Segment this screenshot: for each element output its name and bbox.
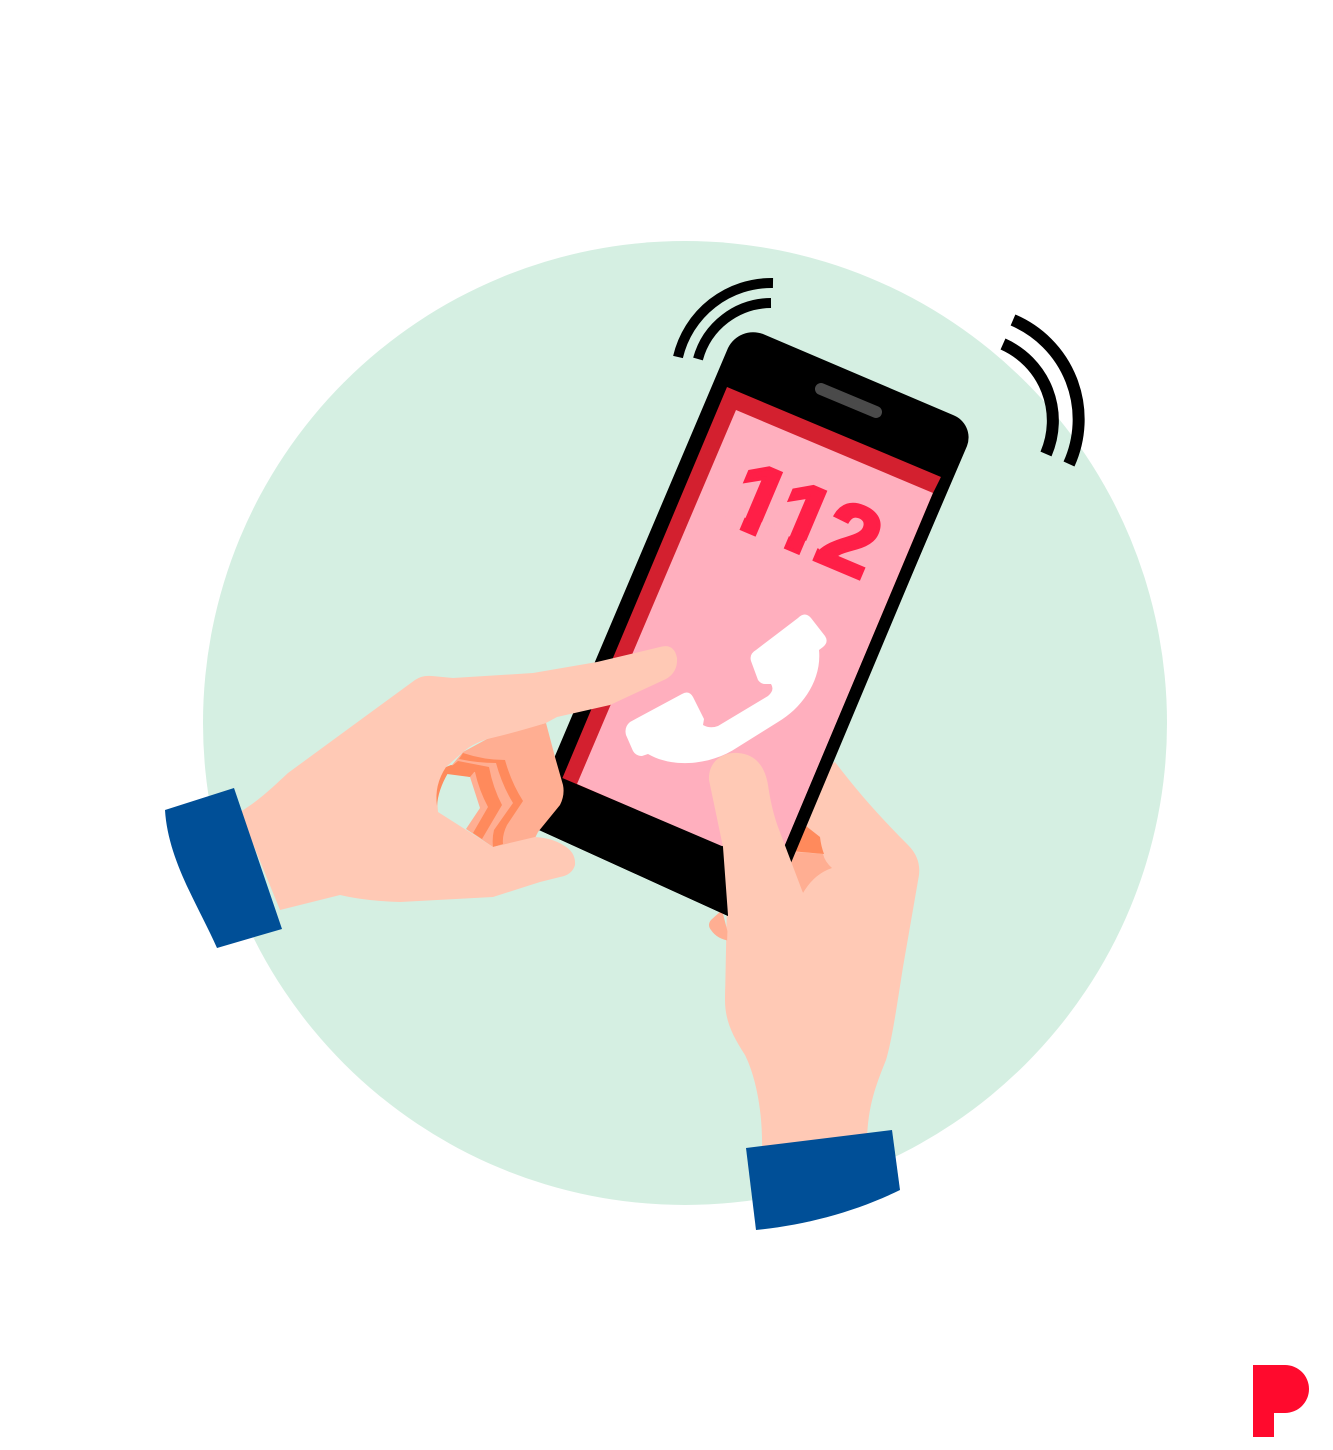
screen header band <box>562 387 941 846</box>
shadow on hand edge <box>436 767 448 806</box>
finger crease middle <box>452 761 502 839</box>
sound arc left outer <box>678 283 773 357</box>
finger crease outer <box>459 753 523 847</box>
hand and index finger <box>240 646 677 910</box>
curled fingers <box>446 723 564 847</box>
sound arc right inner <box>1003 344 1053 454</box>
bottom bezel <box>539 777 785 916</box>
finger shadow orange <box>790 826 824 854</box>
speaker <box>821 389 876 412</box>
screen pink <box>577 410 933 846</box>
right hand: thumb over phone <box>709 753 810 1000</box>
logo <box>1253 1365 1309 1437</box>
handset icon <box>626 614 827 763</box>
right sleeve <box>746 1130 900 1230</box>
left hand <box>240 646 677 910</box>
finger crease inner <box>446 765 475 777</box>
number 112: 112 <box>714 439 897 599</box>
background mint circle <box>203 241 1167 1205</box>
phone <box>530 332 969 916</box>
sound arc right outer <box>1013 320 1079 464</box>
finger shadow peach <box>790 852 832 893</box>
left sleeve <box>165 788 282 948</box>
right hand: back of hand behind phone <box>709 762 919 1150</box>
peach fingertip under phone <box>709 910 730 941</box>
phone body <box>530 332 969 916</box>
right bezel <box>785 446 966 863</box>
sound arc left inner <box>698 303 771 359</box>
